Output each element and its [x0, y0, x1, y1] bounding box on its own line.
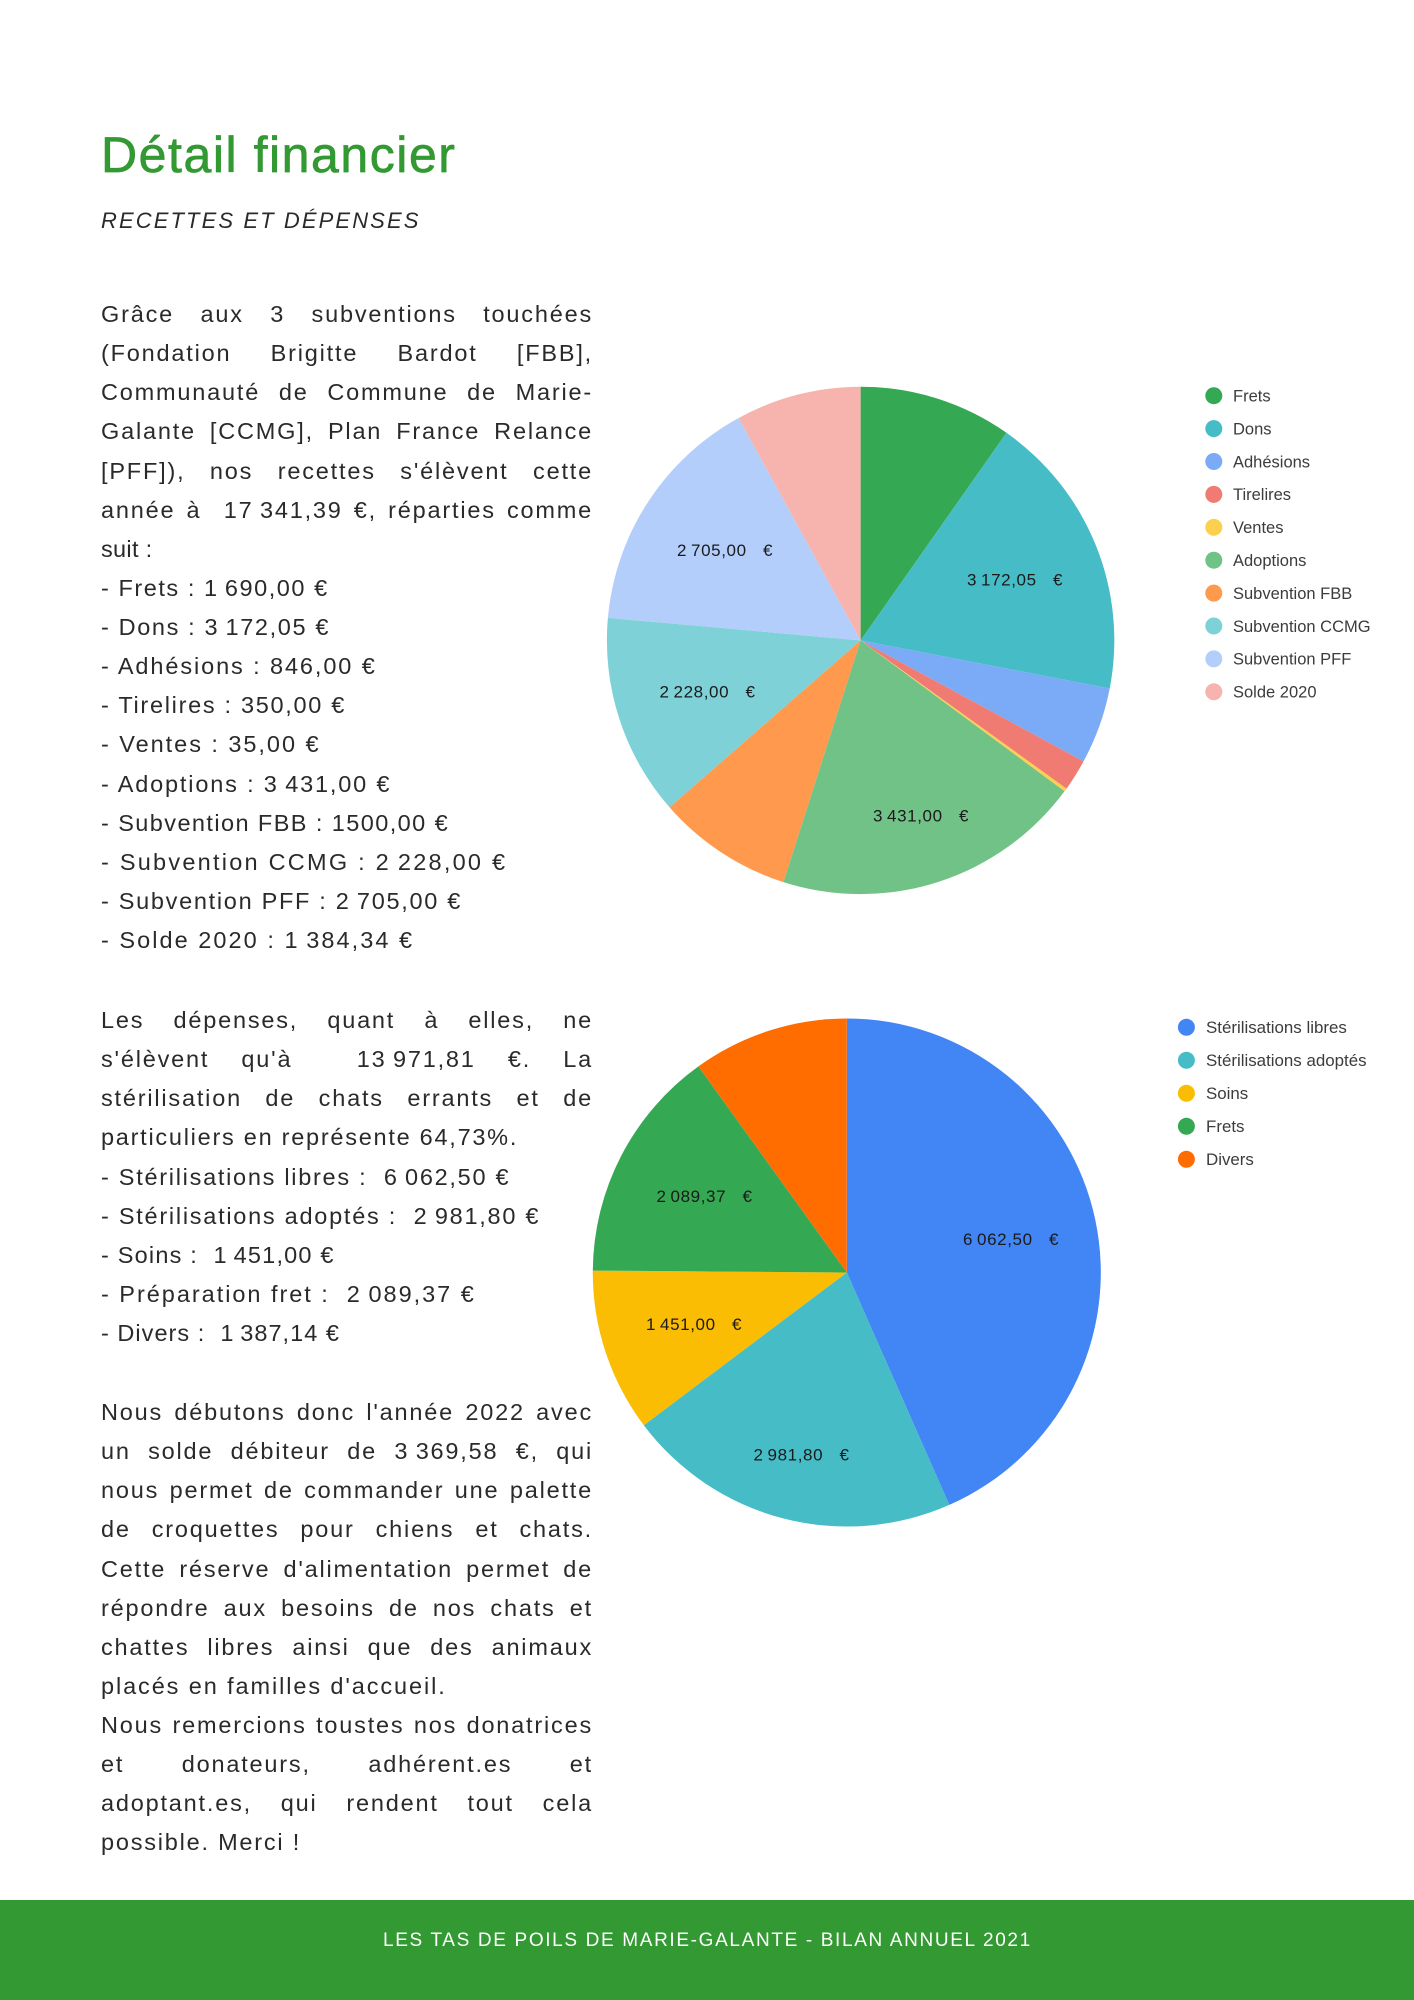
- pie chart: recettes: €: [959, 806, 969, 826]
- text block: conclusion: de croquettes pour chiens et chats.: [101, 1516, 593, 1542]
- text block: recettes: Communauté de Commune de Marie-: [101, 379, 593, 405]
- text block: recettes: - Adhésions : 846,00 €: [101, 653, 377, 679]
- pie chart: recettes: 3 431,00: [873, 806, 943, 826]
- text block: dépenses: Les dépenses, quant à elles, ne: [101, 1007, 593, 1033]
- text block: conclusion: placés en familles d'accueil.: [101, 1673, 447, 1699]
- pie chart: dépenses: 2 089,37: [656, 1187, 726, 1206]
- title: Détail financier: [101, 127, 457, 183]
- legend: dépenses: Soins: [1206, 1084, 1248, 1103]
- pie chart: dépenses: 6 062,50: [963, 1230, 1033, 1249]
- pie chart: recettes: €: [746, 682, 756, 702]
- text block: dépenses: - Divers : 1 387,14 €: [101, 1320, 340, 1346]
- legend: recettes: Adoptions: [1233, 552, 1306, 570]
- text block: recettes: - Frets : 1 690,00 €: [101, 575, 329, 601]
- text block: recettes: (Fondation Brigitte Bardot [FBB],: [101, 340, 593, 366]
- text block: conclusion: Nous débutons donc l'année 2022 avec: [101, 1399, 593, 1425]
- text block: recettes: - Subvention PFF : 2 705,00 €: [101, 888, 462, 914]
- text block: dépenses: - Soins : 1 451,00 €: [101, 1242, 335, 1268]
- text block: conclusion: un solde débiteur de 3 369,58 €, qui: [101, 1438, 593, 1464]
- legend: recettes: Tirelires: [1233, 486, 1291, 504]
- pie chart: recettes: €: [763, 541, 773, 560]
- legend: dépenses: Frets: [1206, 1117, 1244, 1136]
- legend: recettes: Subvention CCMG: [1233, 618, 1371, 636]
- text block: conclusion: Nous remercions toustes nos donatrices: [101, 1712, 593, 1738]
- text block: dépenses: s'élèvent qu'à 13 971,81 €. La: [101, 1046, 593, 1072]
- text block: recettes: - Ventes : 35,00 €: [101, 731, 320, 757]
- pie chart: dépenses: €: [1049, 1230, 1059, 1249]
- legend: dépenses: [1178, 1018, 1367, 1169]
- text block: recettes: Grâce aux 3 subventions touchées: [101, 301, 593, 327]
- text block: conclusion: Cette réserve d'alimentation permet de: [101, 1556, 593, 1582]
- text block: recettes: [101, 301, 593, 953]
- text block: recettes: année à 17 341,39 €, réparties comme: [101, 497, 593, 523]
- pie chart: recettes: 2 705,00: [677, 541, 747, 560]
- legend: dépenses: Divers: [1206, 1150, 1254, 1169]
- text block: conclusion: et donateurs, adhérent.es et: [101, 1751, 593, 1777]
- legend: dépenses: Stérilisations libres: [1206, 1018, 1347, 1037]
- legend: recettes: Subvention FBB: [1233, 585, 1352, 603]
- pie chart: dépenses: €: [840, 1446, 850, 1464]
- pie chart: dépenses: 2 981,80: [754, 1446, 823, 1464]
- text block: conclusion: chattes libres ainsi que des animaux: [101, 1634, 593, 1660]
- text block: dépenses: - Stérilisations adoptés : 2 981,80 €: [101, 1203, 540, 1229]
- text block: recettes: [PFF]), nos recettes s'élèvent cette: [101, 458, 593, 484]
- pie chart: dépenses: [593, 1018, 1101, 1527]
- text block: dépenses: - Stérilisations libres : 6 062,50 €: [101, 1164, 510, 1190]
- text block: recettes: - Adoptions : 3 431,00 €: [101, 770, 391, 796]
- text block: conclusion: nous permet de commander une palette: [101, 1477, 593, 1503]
- subtitle: RECETTES ET DÉPENSES: [101, 208, 421, 233]
- text block: conclusion: adoptant.es, qui rendent tout cela: [101, 1790, 593, 1816]
- text block: dépenses: - Préparation fret : 2 089,37 €: [101, 1281, 476, 1307]
- text block: recettes: Galante [CCMG], Plan France Relance: [101, 418, 593, 444]
- text block: conclusion: répondre aux besoins de nos chats et: [101, 1595, 593, 1621]
- pie chart: dépenses: €: [742, 1187, 753, 1206]
- pie chart: recettes: 3 172,05: [967, 570, 1037, 590]
- legend: recettes: Solde 2020: [1233, 684, 1316, 702]
- text block: recettes: suit :: [101, 536, 152, 562]
- pie chart: recettes: 2 228,00: [660, 682, 729, 702]
- text block: recettes: - Solde 2020 : 1 384,34 €: [101, 927, 414, 953]
- text block: dépenses: particuliers en représente 64,73%.: [101, 1124, 518, 1150]
- text block: recettes: - Dons : 3 172,05 €: [101, 614, 330, 640]
- pie chart: recettes: [607, 387, 1114, 894]
- text block: recettes: - Subvention CCMG : 2 228,00 €: [101, 849, 507, 875]
- footer text: LES TAS DE POILS DE MARIE-GALANTE - BILAN ANNUEL 2021: [383, 1930, 1032, 1951]
- legend: recettes: [1205, 387, 1371, 702]
- legend: dépenses: Stérilisations adoptés: [1206, 1051, 1367, 1070]
- text block: recettes: - Tirelires : 350,00 €: [101, 692, 346, 718]
- text block: conclusion: possible. Merci !: [101, 1829, 301, 1855]
- text block: recettes: - Subvention FBB : 1500,00 €: [101, 810, 449, 836]
- legend: recettes: Frets: [1233, 388, 1271, 406]
- footer band: [0, 1900, 1414, 2000]
- pie chart: dépenses: €: [732, 1315, 742, 1334]
- pie chart: dépenses: 1 451,00: [646, 1315, 716, 1334]
- legend: recettes: Adhésions: [1233, 453, 1310, 471]
- pie chart: recettes: €: [1053, 570, 1063, 590]
- legend: recettes: Subvention PFF: [1233, 651, 1351, 669]
- legend: recettes: Dons: [1233, 420, 1272, 438]
- text block: dépenses: stérilisation de chats errants et de: [101, 1085, 593, 1111]
- text block: conclusion: [101, 1399, 593, 1855]
- text block: dépenses: [101, 1007, 593, 1346]
- legend: recettes: Ventes: [1233, 519, 1283, 537]
